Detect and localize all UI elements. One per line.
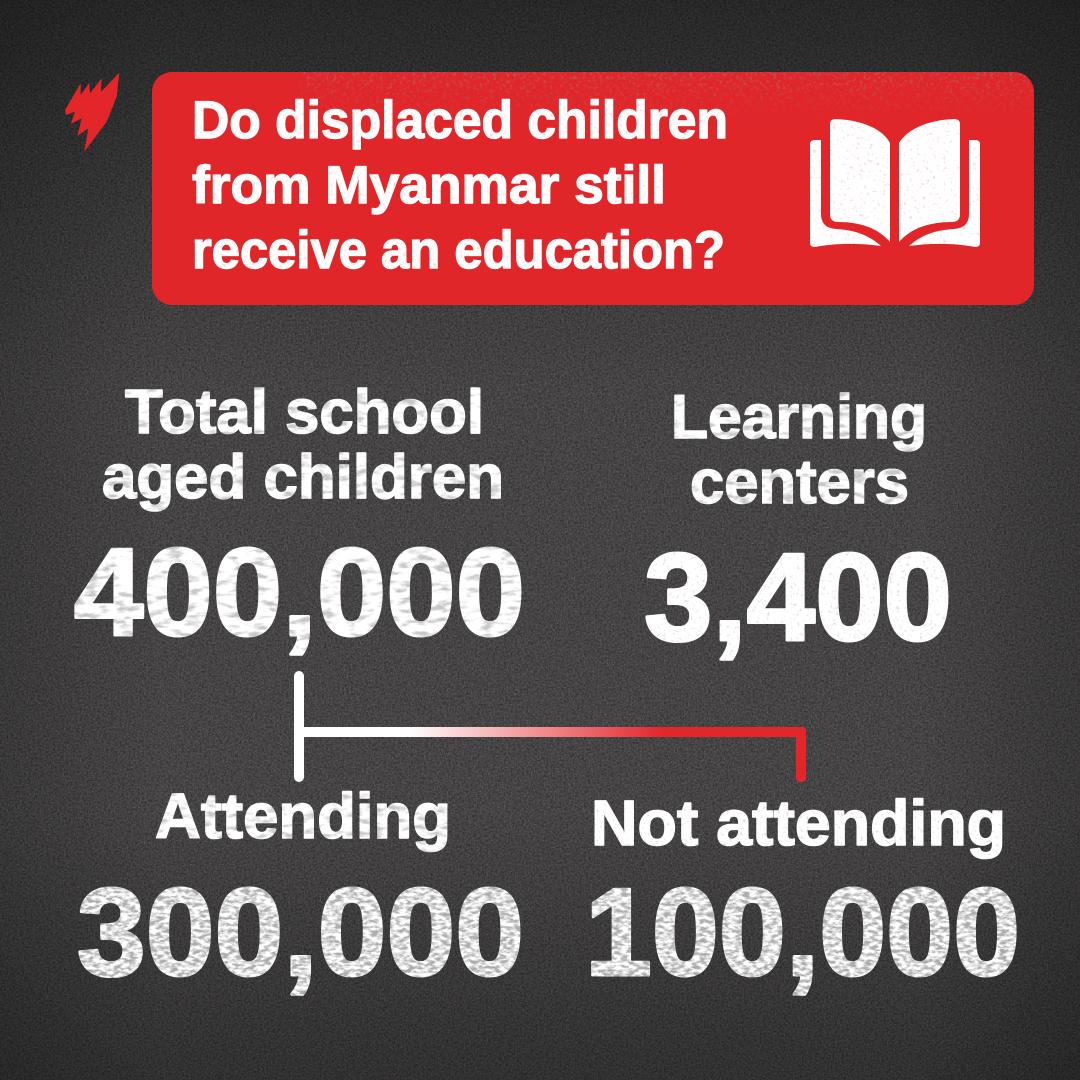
icon: open book (810, 119, 980, 247)
text block: total school aged children label: aged children (102, 443, 504, 512)
heading: question (192, 91, 728, 280)
panel: question banner (152, 72, 1034, 305)
icon: broadcaster logo (65, 73, 119, 152)
label: not attending: Not attending (591, 787, 1006, 859)
number: 3,400: 3,400 (644, 529, 952, 667)
connector: split bracket from white to red (294, 671, 806, 782)
number: 400,000: 400,000 (74, 524, 525, 662)
text block: learning centers label (671, 383, 927, 517)
label: attending: Attending (155, 780, 451, 852)
text block: learning centers label: centers (690, 448, 909, 517)
number: 300,000: 300,000 (77, 864, 524, 1002)
heading: question: receive an education? (192, 221, 725, 280)
heading: question: from Myanmar still (192, 156, 666, 215)
number: 100,000: 100,000 (585, 864, 1020, 1002)
text block: learning centers label: Learning (671, 383, 927, 452)
text block: total school aged children label: Total school (125, 378, 484, 447)
heading: question: Do displaced children (192, 91, 728, 150)
text block: total school aged children label (102, 378, 504, 512)
